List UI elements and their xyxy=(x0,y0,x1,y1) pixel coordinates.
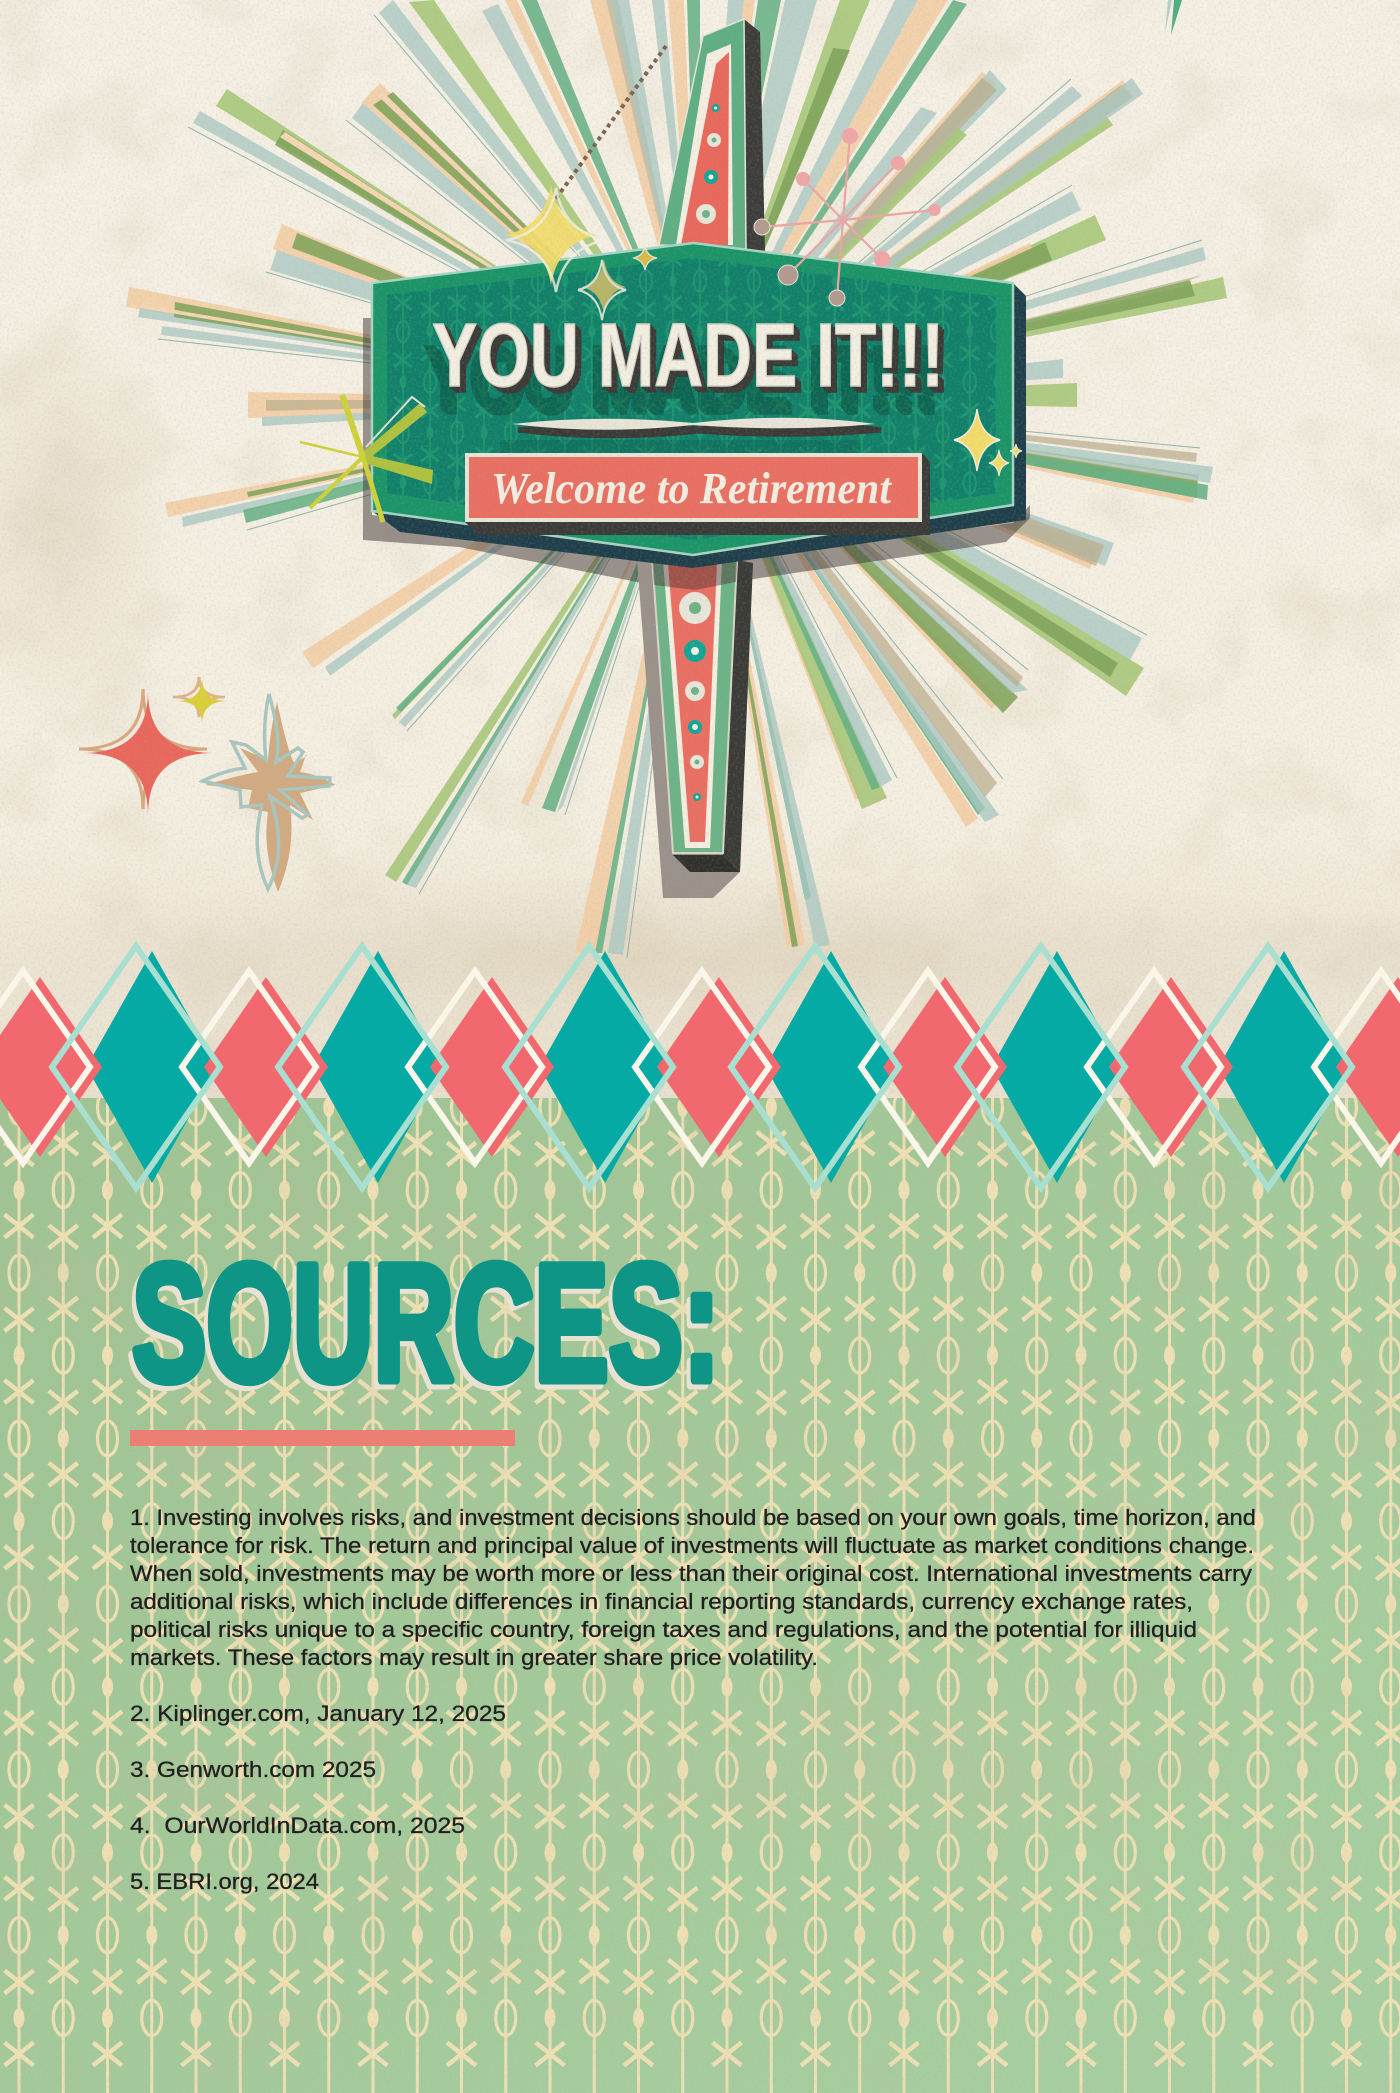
icon: coral sparkle xyxy=(79,689,214,815)
ray bundle: upper left second xyxy=(346,83,700,400)
text block: source notes xyxy=(130,1505,1256,1894)
ray bundle: lower left xyxy=(165,400,700,530)
ray bundle: lower right short xyxy=(700,400,1114,569)
ray bundle: right short xyxy=(700,359,1077,407)
retro sign xyxy=(363,19,1030,898)
source 4: 4. OurWorldInData.com, 2025 xyxy=(130,1813,465,1838)
source 1: markets. These factors may result in greater share price volatility. xyxy=(130,1645,818,1670)
heading: you made it: YOU MADE IT!!! xyxy=(432,306,944,406)
ray bundle: top left of pylon xyxy=(590,0,700,400)
ray bundle: right lower long xyxy=(700,400,1213,503)
icon: right sparkles xyxy=(954,409,1022,476)
ray bundle: upper right long xyxy=(700,78,1143,400)
ray bundle: left short xyxy=(248,392,700,426)
heading: sources: SOURCES: xyxy=(132,1231,720,1416)
sunburst rays xyxy=(126,0,1227,958)
lower pylon xyxy=(637,557,753,898)
ray bundle: top right xyxy=(700,0,967,400)
sign drop shadow xyxy=(363,318,1030,590)
ray sliver: far top right xyxy=(1165,0,1182,35)
pylon dots xyxy=(696,104,721,224)
icon: dusty sparkle xyxy=(578,259,626,320)
upper pylon xyxy=(659,19,765,251)
icon: small top sparkle xyxy=(633,246,657,270)
coral diamonds xyxy=(0,977,1400,1157)
ray bundle: upper right short xyxy=(700,70,1007,400)
source 3: 3. Genworth.com 2025 xyxy=(130,1757,376,1782)
source 2: 2. Kiplinger.com, January 12, 2025 xyxy=(130,1701,506,1726)
green patterned lower panel xyxy=(0,1098,1400,2093)
sign side extrusion xyxy=(372,283,1026,568)
icon: yellow-green asterisk xyxy=(300,395,433,522)
source 1 xyxy=(130,1505,1256,1670)
paper background xyxy=(0,0,1400,1110)
sign inner panel xyxy=(387,258,998,540)
source 1: additional risks, which include differences in financial reporting standards, currency exchange rates, xyxy=(130,1589,1193,1614)
plaque: welcome to retirement: Welcome to Retirement xyxy=(491,464,893,513)
source 1: political risks unique to a specific country, foreign taxes and regulations, and the potential for illiquid xyxy=(130,1617,1197,1642)
icon: small yellow sparkle xyxy=(173,677,228,725)
source 1: tolerance for risk. The return and principal value of investments will fluctuate as market conditions change. xyxy=(130,1533,1254,1558)
ray bundle: top left xyxy=(374,0,700,400)
ray bundle: upper left long xyxy=(188,89,700,400)
icon: tan eight-point burst xyxy=(203,694,335,892)
ray bundle: bottom right long xyxy=(700,400,830,947)
divider flourish xyxy=(500,418,881,462)
plaque: welcome to retirement xyxy=(465,453,930,535)
ray bundle: top right of pylon xyxy=(700,0,870,400)
ray bundle: left middle xyxy=(266,224,700,400)
source 1: 1. Investing involves risks, and investment decisions should be based on your own goals, time horizon, and xyxy=(130,1505,1256,1530)
paper crease stain xyxy=(542,46,666,218)
ray bundle: bottom near pylon xyxy=(575,400,700,958)
mint diamond outlines xyxy=(52,946,1352,1188)
ray bundle: lower right long xyxy=(700,400,1147,696)
ray bundle: bottom right second xyxy=(700,400,897,809)
cream diamond outlines xyxy=(0,971,1400,1163)
ray bundle: bottom left short xyxy=(302,400,700,676)
ray bundle: bottom left long xyxy=(385,400,700,894)
ray bundle: bottom left thin xyxy=(392,400,700,731)
icon: atomic pink starburst xyxy=(754,128,940,306)
teal diamonds xyxy=(86,951,1350,1183)
pylon dots xyxy=(679,592,711,801)
ray bundle: left long xyxy=(126,287,700,400)
ray bundle: bottom right third xyxy=(700,400,1003,827)
sign face xyxy=(372,243,1013,555)
icon: large yellow sparkle xyxy=(504,185,606,292)
source 5: 5. EBRI.org, 2024 xyxy=(130,1869,319,1894)
ray bundle: right upper second xyxy=(700,185,1106,400)
coral heading rule xyxy=(130,1430,515,1446)
ray bundle: bottom middle xyxy=(521,400,700,815)
ray bundle: right upper long xyxy=(700,240,1227,400)
argyle band xyxy=(0,946,1400,1188)
ray bundle: lower right fourth xyxy=(700,400,1028,713)
source 1: When sold, investments may be worth more or less than their original cost. International investments carry xyxy=(130,1561,1252,1586)
